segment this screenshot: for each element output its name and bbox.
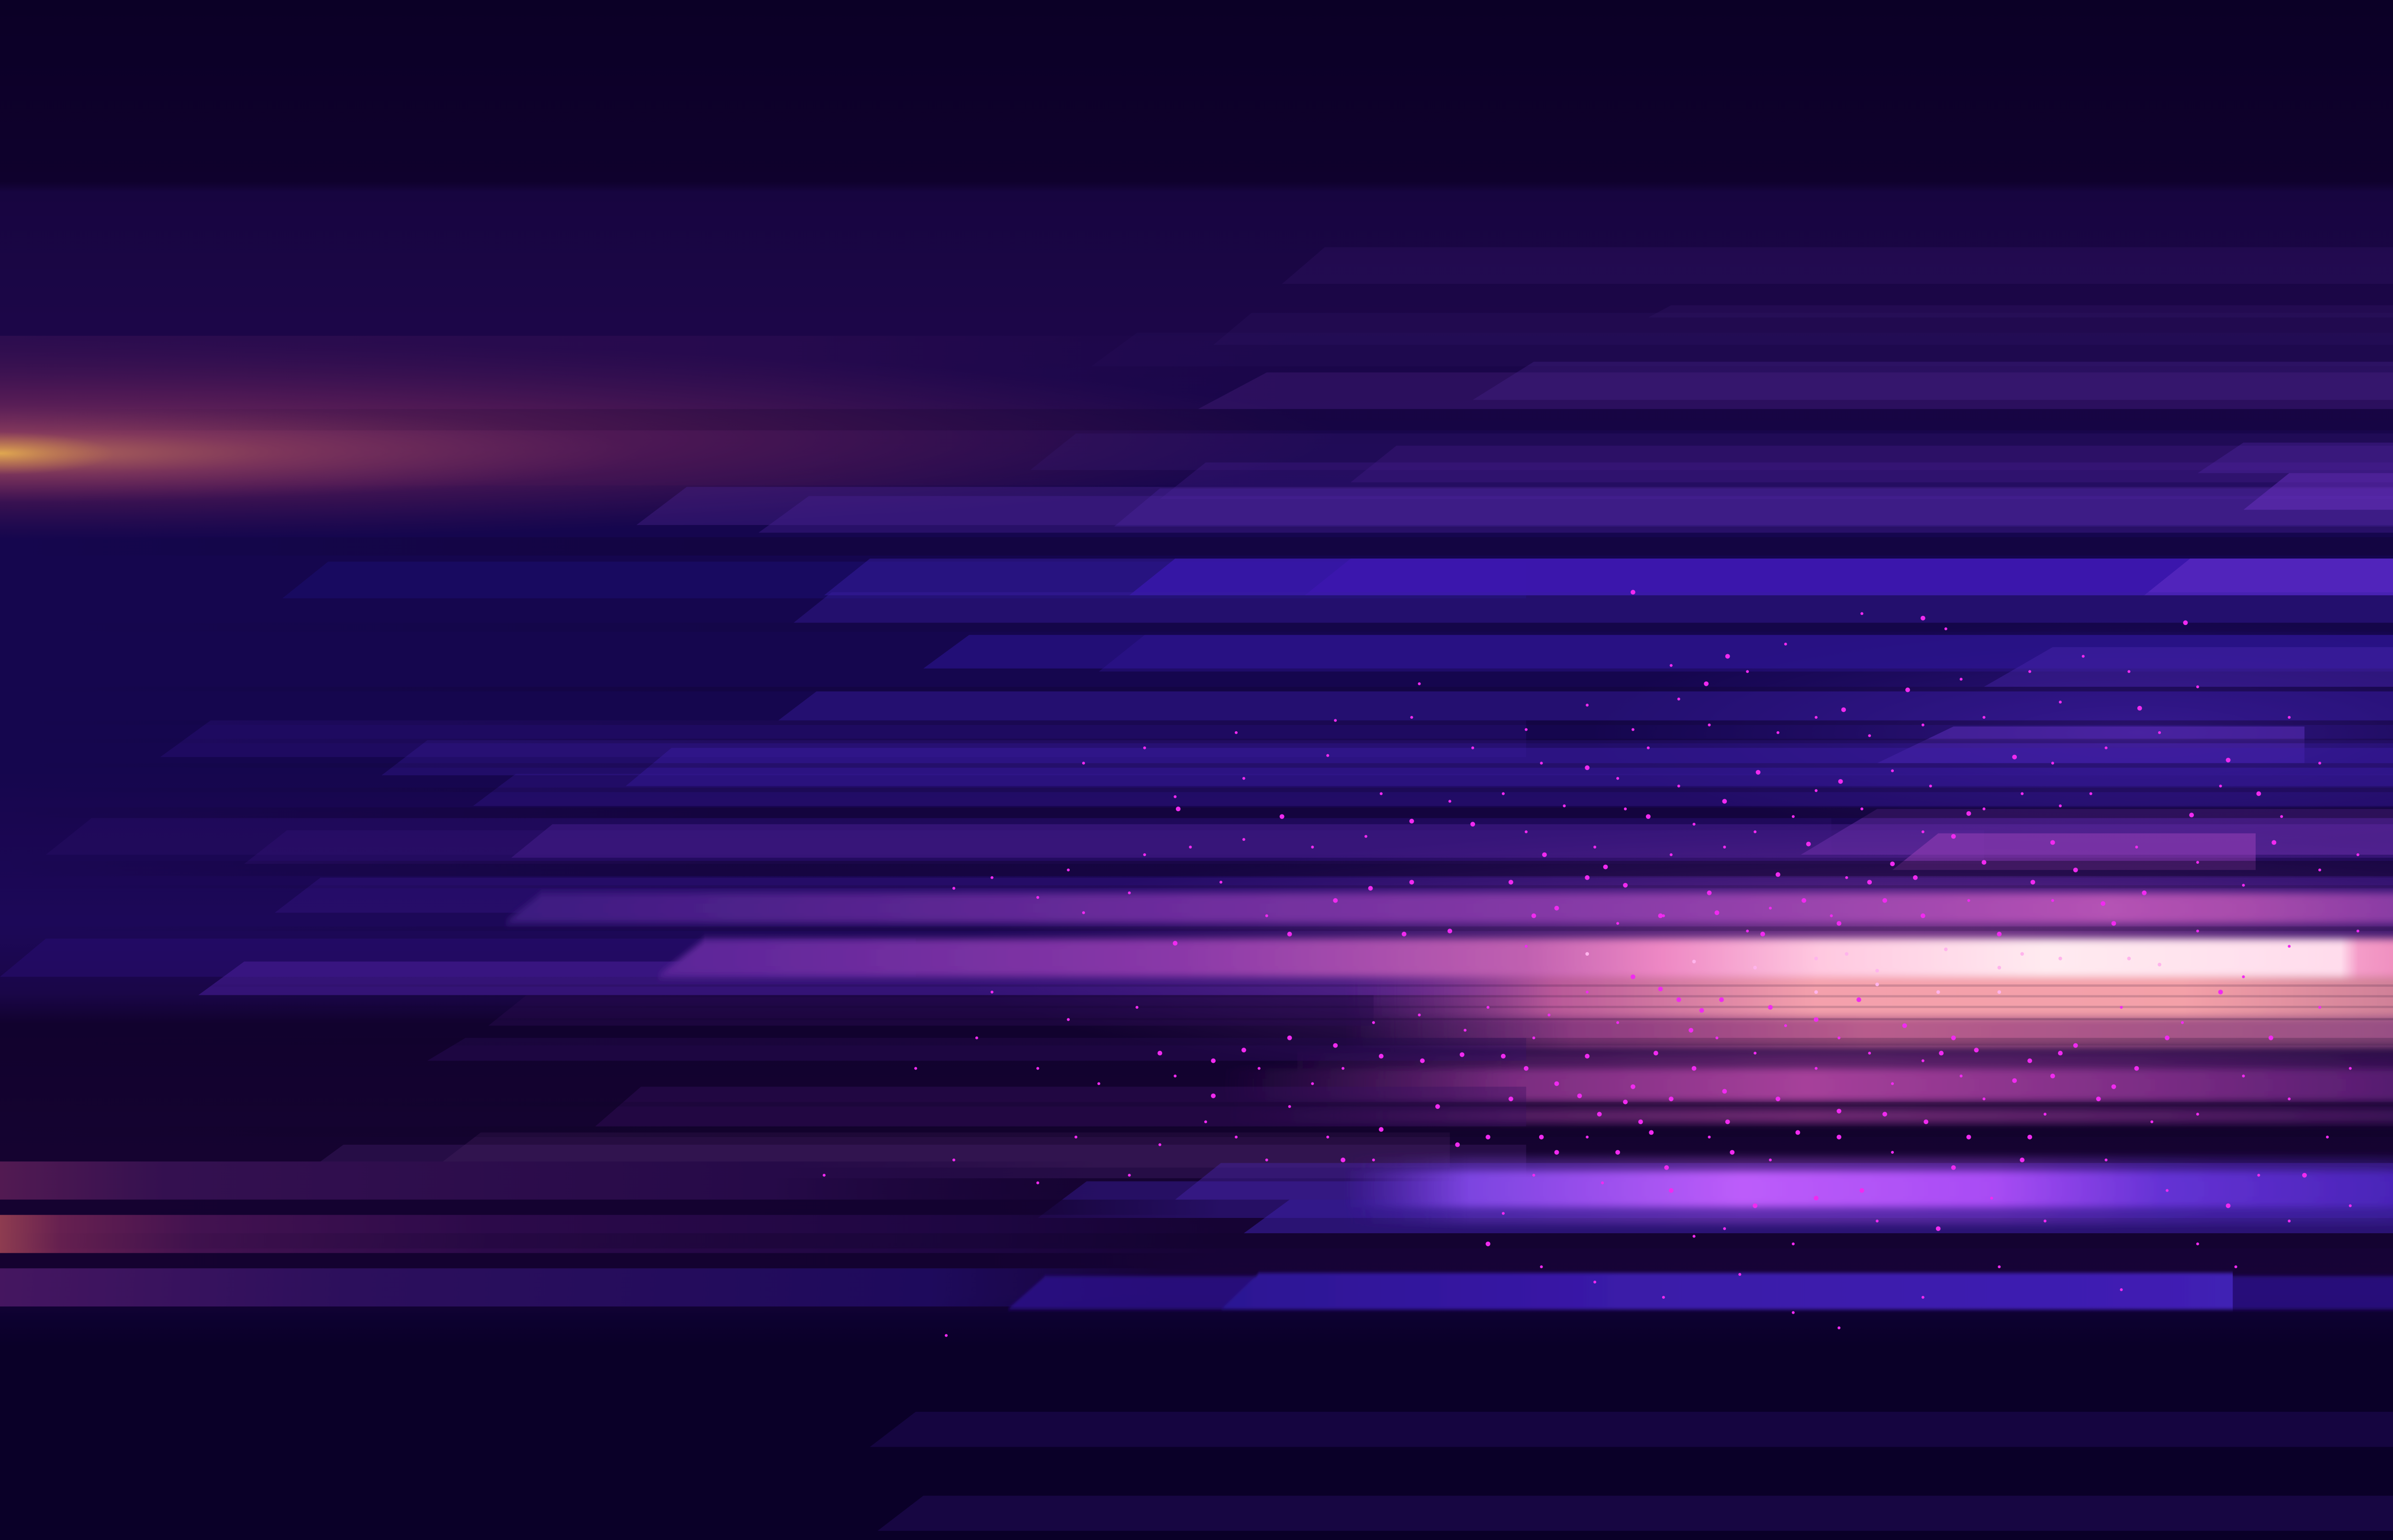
main pink light streak [503,893,2393,1123]
violet light streak [1343,1157,2393,1224]
upper slanted bands [637,247,2393,533]
amber glow top left [0,336,1343,540]
magenta particle field [824,592,2358,1336]
purple haze on right [1587,618,2393,847]
mid slanted bands [0,692,2393,995]
lower slanted bands [298,995,2393,1233]
bottom blue bands [870,1273,2393,1531]
horizontal dark stripes [0,409,2393,1249]
left red bars [0,1161,1221,1306]
pale particles over glow core [1587,949,2159,992]
soft pink halo [946,824,2393,1099]
blue slanted bands [282,558,2393,763]
